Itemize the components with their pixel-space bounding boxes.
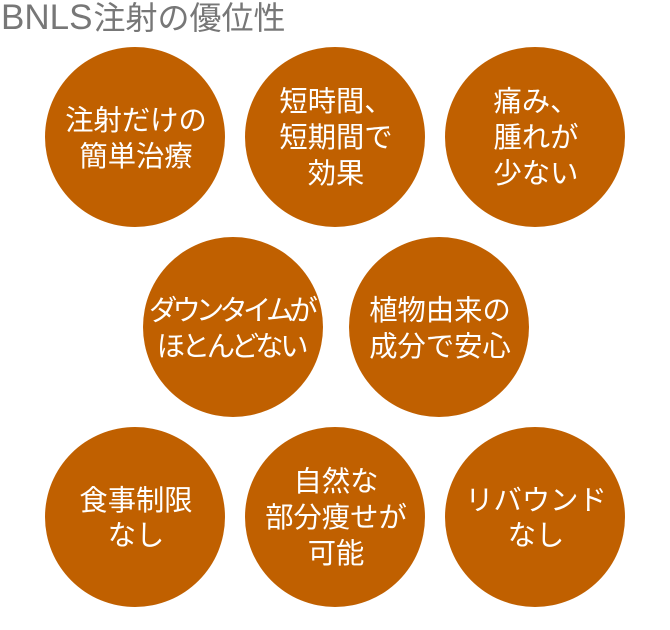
circle: no rebound xyxy=(445,427,625,607)
circle: injection only: 簡単治療 xyxy=(79,140,193,172)
circle: short time: 効果 xyxy=(308,157,364,189)
circle: no rebound: なし xyxy=(508,519,564,551)
circle: no dietary restrictions: 食事制限 xyxy=(79,484,193,516)
circle: little pain: 少ない xyxy=(494,157,578,189)
circle: little pain: 腫れが xyxy=(494,121,578,153)
circle: plant derived: 植物由来の xyxy=(369,294,511,326)
circle: short time: 短時間、 xyxy=(279,85,393,117)
circle: little pain xyxy=(445,47,625,227)
circle: injection only xyxy=(45,47,225,227)
circle: natural partial slimming: 可能 xyxy=(308,537,364,569)
circle: no dietary restrictions xyxy=(45,427,225,607)
circle: natural partial slimming xyxy=(245,427,425,607)
circle: plant derived xyxy=(349,237,529,417)
circle: natural partial slimming: 部分痩せが xyxy=(265,501,407,533)
circle: little downtime xyxy=(143,237,323,417)
circle: little downtime: ダウンタイムが xyxy=(149,294,313,326)
circle: short time xyxy=(245,47,425,227)
circle: injection only: 注射だけの xyxy=(65,104,207,136)
circle: plant derived: 成分で安心 xyxy=(369,330,511,362)
circle: natural partial slimming: 自然な xyxy=(294,465,378,497)
circle: no rebound: リバウンド xyxy=(465,484,607,516)
circle: short time: 短期間で xyxy=(279,121,393,153)
circle: little downtime: ほとんどない xyxy=(157,330,305,362)
circle: no dietary restrictions: なし xyxy=(108,519,164,551)
circle: little pain: 痛み、 xyxy=(494,85,578,117)
